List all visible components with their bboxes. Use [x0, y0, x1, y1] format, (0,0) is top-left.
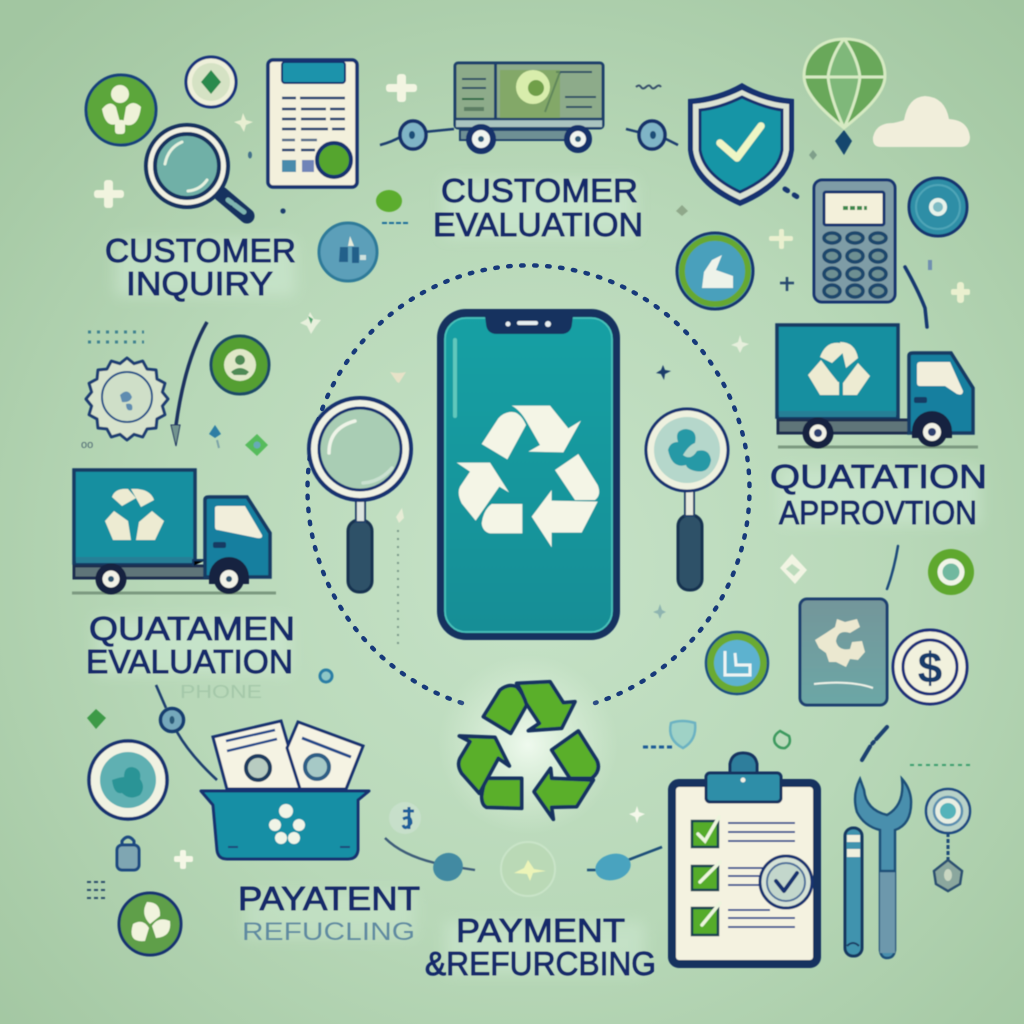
panel: payment bin — [87, 685, 420, 955]
icon: small oo mark: oo — [81, 439, 93, 451]
icon: green leaf diamond — [87, 709, 106, 729]
panel: central phone — [300, 309, 749, 682]
icon: parachute balloon — [804, 39, 885, 155]
icon: teal badge — [89, 741, 167, 819]
icon: faint dashed green strip — [910, 764, 972, 766]
icon: connector with node — [156, 685, 217, 780]
heading: customer inquiry — [105, 232, 296, 302]
icon: small squiggle text mark — [636, 86, 661, 88]
heading: quotation approval: APPROVTION — [779, 494, 977, 531]
icon: shield with check — [688, 83, 794, 206]
icon: green clover badge — [119, 893, 181, 955]
heading: payment refurbishing — [425, 912, 656, 982]
icon: two banknotes — [213, 721, 363, 789]
icon: bottom connector left — [385, 838, 475, 885]
icon: dotted rows — [88, 332, 144, 342]
icon: smartphone — [437, 309, 620, 640]
heading: customer evaluation: EVALUATION — [433, 206, 643, 243]
icon: recycle bin — [201, 791, 369, 859]
icon: dollar coin — [893, 630, 967, 704]
icon: tiny marks — [676, 150, 930, 291]
icon: left delivery truck — [72, 470, 276, 593]
icon: curved pendant connector — [171, 322, 207, 446]
icon: small slash — [862, 727, 887, 760]
icon: small lock — [117, 837, 139, 870]
panel: customer evaluation — [376, 63, 678, 243]
icon: slash — [887, 546, 898, 589]
icon: blue house badge — [319, 223, 377, 281]
heading: payment refurbishing: &REFURCBING — [425, 945, 656, 982]
dashed process circle — [308, 265, 750, 703]
icon: clipboard checklist — [672, 753, 817, 964]
text lines of checklist — [728, 823, 795, 927]
panel: checklist and tools — [672, 753, 970, 964]
icon: small sparkle — [234, 113, 253, 132]
icon: delivery cart — [455, 63, 603, 151]
panel: quotation approval — [643, 325, 987, 765]
panel: security and costing — [676, 39, 970, 327]
icon: right delivery truck — [777, 325, 978, 447]
icon: green recycle badge — [86, 75, 156, 145]
panel: left middle icons — [72, 322, 295, 702]
icon: left magnifying glass — [309, 398, 411, 592]
icon: wrench — [855, 779, 911, 958]
icon: green blue badge — [706, 632, 768, 694]
icon: plus sparkle — [629, 806, 645, 823]
heading: quotation approval: QUATATION — [770, 458, 987, 495]
icon: glowing star node — [501, 842, 555, 896]
icon: green ring badge — [928, 549, 974, 595]
icon: target pin — [926, 789, 970, 891]
icon: teal target badge — [909, 178, 967, 236]
icon: small coin — [186, 57, 236, 107]
icon: blue mark left — [389, 802, 421, 834]
icon: tiny navy dots — [248, 152, 286, 214]
icon: magnifying glass — [146, 125, 247, 216]
icon: tablet with gear — [800, 599, 887, 705]
icon: small dashes — [785, 189, 799, 198]
icon: cloud — [873, 96, 970, 147]
heading: payment recycling: PAYATENT — [238, 880, 420, 917]
icon: green ring badge — [677, 233, 753, 309]
icon: small blue pin — [209, 425, 221, 448]
heading: quotation evaluation: EVALUATION — [86, 643, 293, 680]
heading: payment recycling: REFUCLING — [242, 918, 415, 946]
heading: payment refurbishing: PAYMENT — [456, 912, 625, 949]
heading: customer inquiry: CUSTOMER — [105, 232, 296, 269]
icon: approval badge — [760, 856, 812, 908]
icon: small sparkles around the phone — [300, 312, 749, 682]
icon: small shield ghost — [643, 721, 695, 748]
icon: quote document — [268, 60, 357, 187]
icon: small plus — [386, 74, 417, 102]
icon: small green diamond — [245, 434, 268, 456]
heading: customer evaluation — [433, 172, 643, 243]
soft glow behind central recycle symbol — [438, 655, 618, 835]
icon: plus sparkles — [769, 229, 970, 303]
icon: small dash grid — [87, 882, 108, 898]
icon: bottom connector right — [587, 847, 662, 884]
icon: green blob — [376, 190, 410, 223]
icon: seal gear badge — [86, 358, 168, 440]
heading: customer inquiry: INQUIRY — [126, 265, 273, 302]
icon: white recycle symbol on phone — [457, 406, 599, 547]
icon: slash connector — [905, 267, 927, 327]
icon: plus sparkle — [174, 850, 193, 869]
heading: quotation approval — [770, 458, 987, 531]
icon: plus sparkle — [94, 180, 124, 208]
icon: calculator — [814, 180, 895, 302]
heading: quotation evaluation: QUATAMEN — [89, 610, 295, 647]
heading: quotation evaluation — [86, 610, 295, 680]
faint label: PHONE — [180, 682, 262, 702]
icon: pencil — [845, 828, 862, 956]
icon: green person badge — [211, 336, 269, 394]
panel: customer inquiry — [86, 57, 377, 302]
panel: central recycle and payment — [385, 682, 662, 982]
icon: check boxes — [692, 817, 720, 935]
icon: diamond sparkle — [780, 554, 807, 584]
heading: customer evaluation: CUSTOMER — [441, 172, 638, 209]
icon: small leaf glyph — [774, 731, 790, 748]
icon: green recycle symbol — [459, 682, 598, 819]
icon: connector line with nodes — [380, 121, 678, 149]
icon: dollar coin: $ — [918, 644, 942, 693]
icon: right magnifying glass — [646, 409, 728, 590]
heading: payment recycling — [238, 880, 420, 946]
